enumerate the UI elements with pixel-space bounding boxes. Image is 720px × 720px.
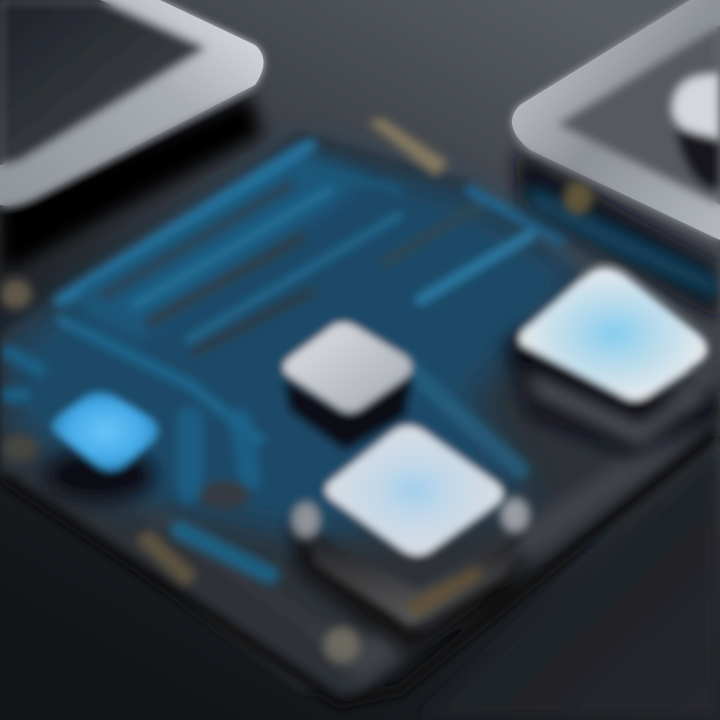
chip body xyxy=(285,375,412,450)
device frame xyxy=(512,0,720,240)
small device chip xyxy=(672,74,720,145)
small device chip base xyxy=(676,130,720,190)
gold clip xyxy=(564,182,592,214)
top left device xyxy=(0,0,264,270)
chip shadow xyxy=(290,520,530,655)
device screen xyxy=(0,0,205,165)
button top xyxy=(52,392,158,470)
chip top xyxy=(326,426,502,555)
blue underside xyxy=(525,185,720,300)
lower right dark surface xyxy=(420,440,720,720)
chip: bottom large xyxy=(290,426,530,655)
circuit board xyxy=(0,130,720,700)
chip: right large xyxy=(505,268,720,455)
button base xyxy=(45,449,155,501)
chip top xyxy=(284,323,412,412)
chip side highlight xyxy=(292,502,320,538)
circuit traces xyxy=(8,145,560,575)
gold and grey solder spots xyxy=(0,279,360,663)
device frame xyxy=(0,0,264,206)
chip top xyxy=(520,268,708,400)
chip shadow xyxy=(505,330,720,455)
top right device xyxy=(512,0,720,320)
device screen xyxy=(558,25,720,205)
gold accent xyxy=(405,565,480,618)
device shadow xyxy=(0,95,262,270)
sharp edge base: devices at canvas edges xyxy=(0,0,720,240)
chip body xyxy=(525,370,710,445)
device shadow xyxy=(515,150,720,320)
chip: centre small xyxy=(284,323,412,450)
gold connector top xyxy=(368,118,448,176)
board front edge xyxy=(4,433,716,703)
blue glowing button xyxy=(45,392,158,501)
chip body xyxy=(305,530,525,625)
